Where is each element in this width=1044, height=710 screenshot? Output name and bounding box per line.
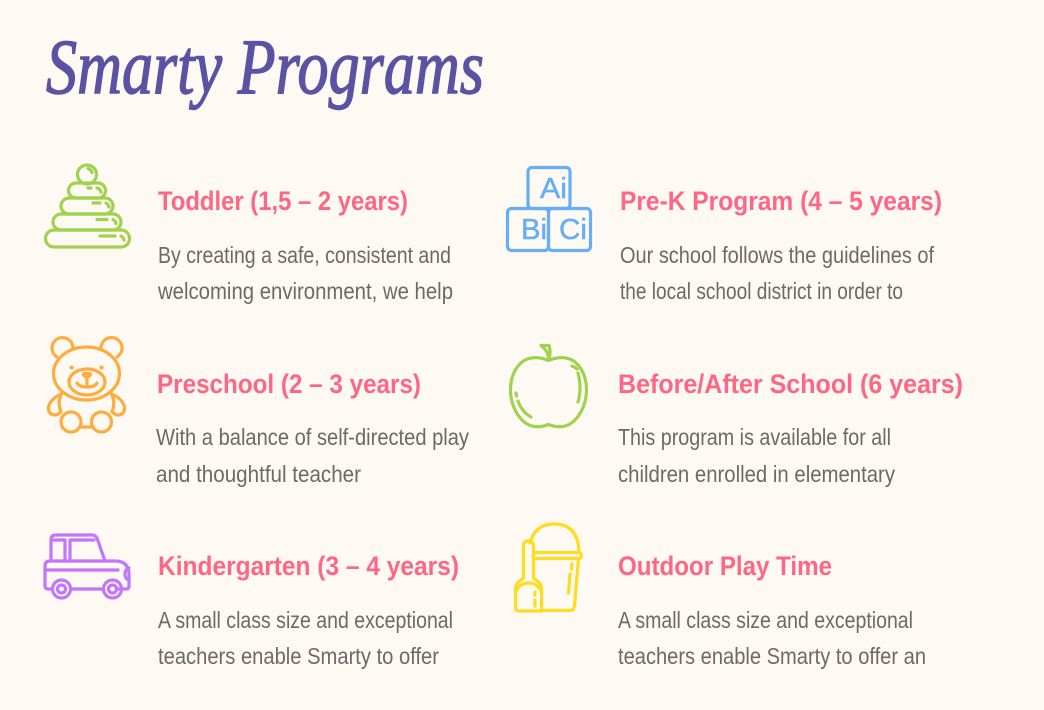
icon: teddy bear	[48, 338, 124, 432]
heading: before/after school: Before/After School (6 years)	[618, 369, 963, 399]
description: outdoor play time: teachers enable Smarty to offer an	[618, 643, 926, 669]
icon: alphabet blocks	[508, 168, 590, 250]
icon: alphabet blocks: Ci	[559, 214, 587, 246]
panel: before/after school	[510, 346, 963, 487]
description: preschool: and thoughtful teacher	[156, 461, 361, 487]
icon: alphabet blocks: Bi	[521, 214, 547, 246]
description: before/after school: This program is available for all	[618, 424, 891, 450]
description: pre-k program: the local school district in order to	[620, 278, 903, 304]
description: kindergarten: teachers enable Smarty to offer	[158, 643, 439, 669]
panel: outdoor play time	[516, 524, 926, 669]
description: pre-k program	[620, 242, 935, 304]
heading: pre-k program: Pre-K Program (4 – 5 years)	[620, 186, 942, 216]
panel: pre-k program	[508, 168, 942, 304]
icon: ring stacker	[46, 165, 130, 247]
description: pre-k program: Our school follows the guidelines of	[620, 242, 935, 268]
icon: alphabet blocks: Ai	[540, 173, 567, 205]
panel: preschool	[48, 338, 469, 487]
heading: outdoor play time: Outdoor Play Time	[618, 551, 832, 581]
description: toddler: By creating a safe, consistent and	[158, 242, 451, 268]
description: toddler: welcoming environment, we help	[157, 278, 453, 304]
description: outdoor play time	[618, 607, 926, 669]
description: kindergarten	[158, 607, 453, 669]
heading: toddler: Toddler (1,5 – 2 years)	[158, 186, 408, 216]
description: outdoor play time: A small class size and exceptional	[618, 607, 913, 633]
heading: preschool: Preschool (2 – 3 years)	[157, 369, 421, 399]
description: preschool: With a balance of self-directed play	[156, 424, 469, 450]
heading: kindergarten: Kindergarten (3 – 4 years)	[158, 551, 459, 581]
description: toddler	[157, 242, 453, 304]
description: preschool	[156, 424, 469, 487]
panel: toddler	[46, 165, 453, 304]
description: before/after school	[618, 424, 895, 487]
description: kindergarten: A small class size and exceptional	[158, 607, 453, 633]
icon: bucket and spade	[516, 524, 582, 611]
icon: apple	[510, 346, 586, 427]
description: before/after school: children enrolled in elementary	[618, 461, 895, 487]
icon: toy car	[45, 535, 129, 598]
title: Smarty Programs	[46, 23, 484, 110]
panel: kindergarten	[45, 535, 459, 669]
